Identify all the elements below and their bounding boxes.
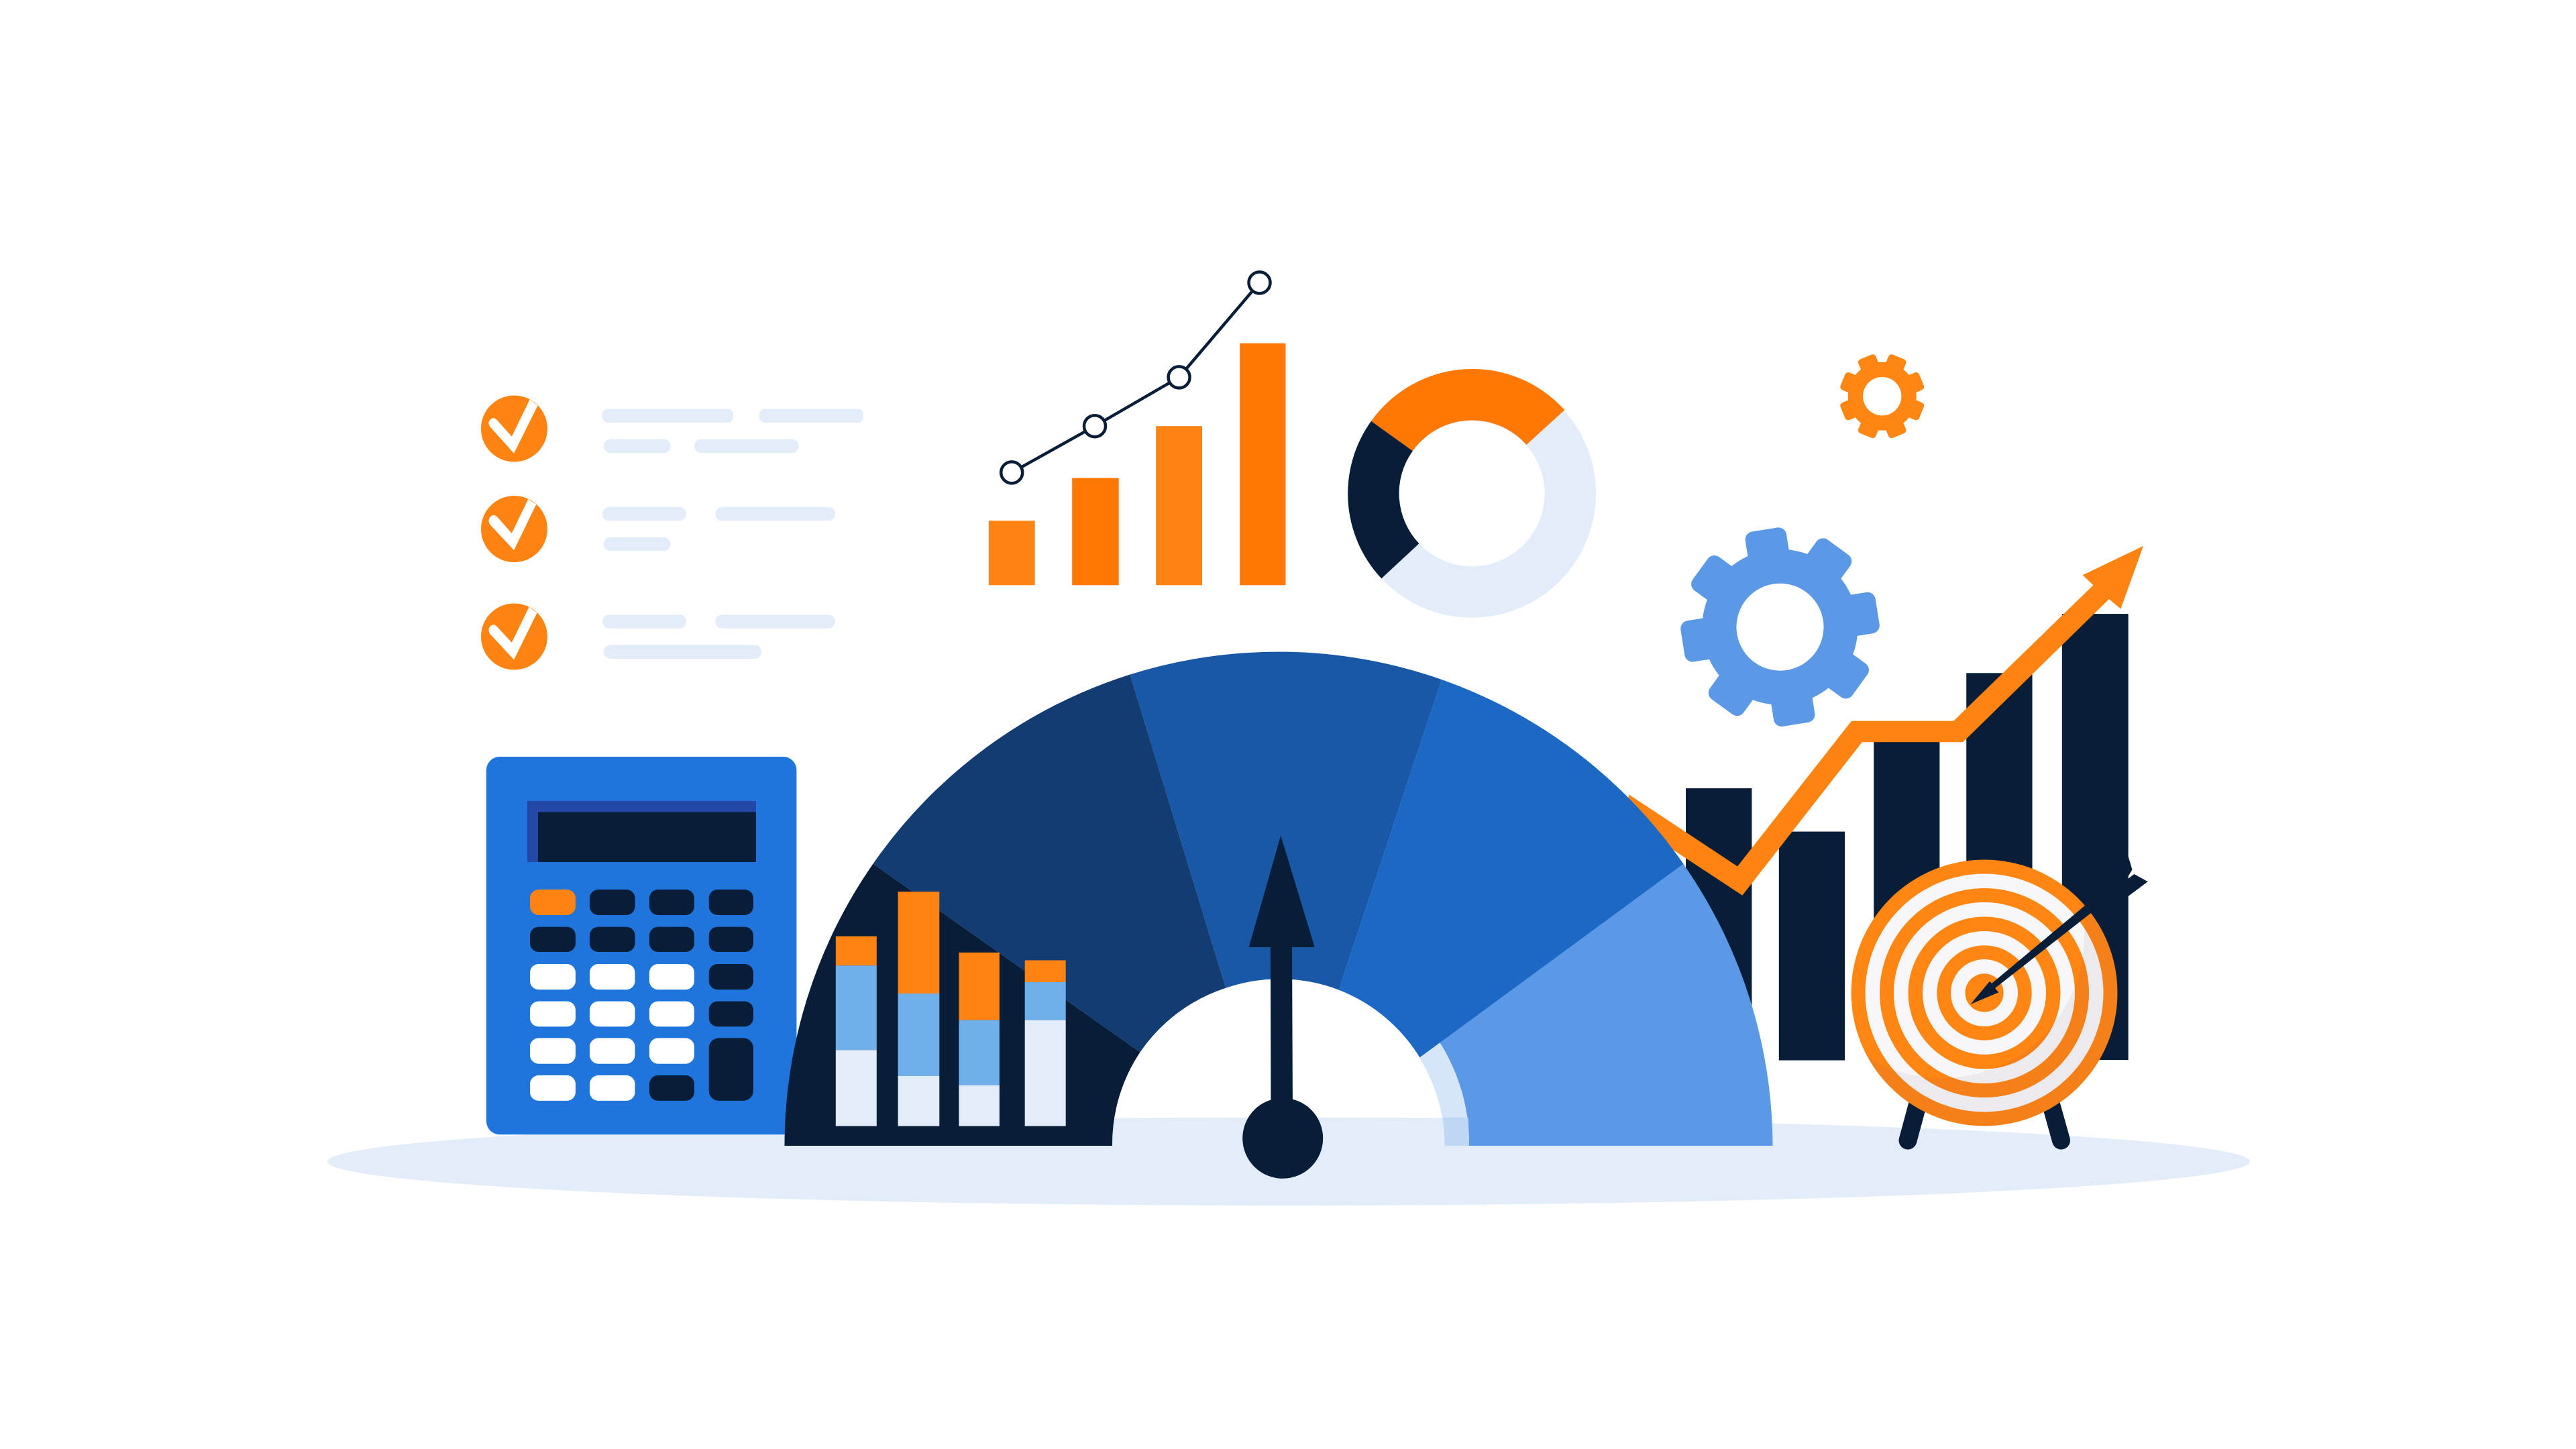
growth arrow bbox=[1623, 546, 2143, 896]
stacked bar 4 bbox=[1025, 961, 1066, 1126]
calculator screen bbox=[527, 801, 756, 862]
panel: gauge bbox=[785, 652, 1772, 1146]
donut chart bbox=[1348, 369, 1570, 592]
icon: large blue gear bbox=[1667, 515, 1893, 740]
gauge segment: bright blue bbox=[1339, 680, 1684, 1059]
gauge needle bbox=[1242, 836, 1323, 1179]
icon: check badge 2 bbox=[481, 496, 547, 562]
gauge inner ring bbox=[1419, 1042, 1469, 1146]
gauge segment: darkest bbox=[785, 864, 1140, 1146]
icon: check badge 1 bbox=[481, 396, 547, 462]
target legs bbox=[1908, 1103, 2061, 1140]
arrow in target bbox=[1971, 856, 2148, 1004]
target rings bbox=[1851, 860, 2117, 1126]
gauge segment: navy bbox=[873, 675, 1226, 1052]
orange bars bbox=[989, 343, 1285, 585]
dark rising bar chart bbox=[1686, 614, 2129, 1061]
icon: check badge 3 bbox=[481, 604, 547, 669]
stacked bar 1 bbox=[836, 936, 877, 1126]
trend line bbox=[1001, 272, 1271, 483]
stacked bar 2 bbox=[898, 892, 939, 1126]
text placeholder lines 2 bbox=[602, 507, 835, 551]
floor ellipse bbox=[327, 1118, 2250, 1205]
panel: target bbox=[1851, 856, 2148, 1150]
text placeholder lines 3 bbox=[602, 614, 835, 659]
bar and line chart bbox=[989, 272, 1285, 585]
text placeholder lines 1 bbox=[602, 409, 863, 453]
stacked bar chart bbox=[836, 892, 1066, 1126]
gauge segment: light blue bbox=[1440, 864, 1772, 1146]
stacked bar 3 bbox=[959, 953, 1000, 1126]
gauge segment: mid blue bbox=[1130, 652, 1442, 990]
calculator buttons bbox=[530, 890, 753, 1101]
icon: small orange gear bbox=[1839, 354, 1925, 439]
panel: checklist bbox=[481, 396, 863, 669]
panel: calculator bbox=[486, 757, 796, 1134]
calculator body bbox=[486, 757, 796, 1134]
